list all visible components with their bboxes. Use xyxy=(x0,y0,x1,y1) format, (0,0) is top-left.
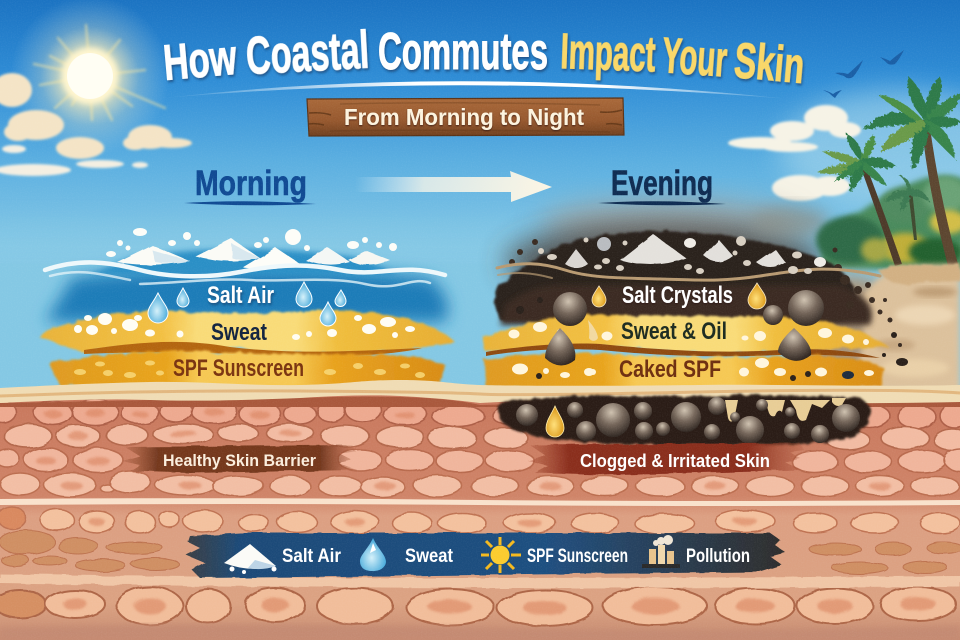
layer label: Sweat & Oil: Sweat & Oil xyxy=(621,318,727,345)
legend icon: water drop xyxy=(360,538,386,571)
skin cells: row 2 xyxy=(4,424,960,451)
oil drops xyxy=(592,283,766,309)
layer: salt air xyxy=(45,228,448,322)
pale strip below legend xyxy=(0,574,960,588)
legend xyxy=(186,533,785,578)
icon: sun xyxy=(10,0,170,156)
clouds: left xyxy=(0,73,192,176)
salt crystal piles xyxy=(565,234,785,268)
layer label: Sweat: Sweat xyxy=(211,319,267,346)
skin cells: row 1 xyxy=(0,398,960,429)
label: clogged and irritated skin: Clogged & Irritated Skin xyxy=(580,451,770,471)
birds xyxy=(823,50,904,98)
title word: Commutes: Commutes xyxy=(378,23,548,81)
layer label: Salt Crystals: Salt Crystals xyxy=(622,282,733,309)
dripping sunscreen xyxy=(725,398,846,422)
tan wave line xyxy=(497,264,880,280)
title word: Coastal: Coastal xyxy=(245,21,370,86)
clog rocks xyxy=(516,397,860,444)
background: evening haze xyxy=(505,199,830,300)
title xyxy=(161,21,807,94)
large dirt rocks xyxy=(545,290,824,366)
salt flecks xyxy=(106,228,397,257)
subtitle plank xyxy=(307,98,624,136)
skin base xyxy=(0,392,960,640)
brown stripe xyxy=(486,343,880,358)
layer label: Salt Air: Salt Air xyxy=(207,282,274,309)
background: sandy beach xyxy=(795,264,960,395)
sweat salt flecks xyxy=(74,313,415,340)
skin cells: row 3 xyxy=(0,448,960,473)
label: clogged and irritated skin xyxy=(528,443,804,475)
dirt speck fringe xyxy=(509,239,902,347)
layer: sweat xyxy=(38,310,455,357)
bottom mottled skin xyxy=(0,625,960,640)
legend text: SPF Sunscreen: SPF Sunscreen xyxy=(527,546,628,567)
legend text: Sweat: Sweat xyxy=(405,546,454,567)
clogged pores xyxy=(497,396,871,446)
clouds: right xyxy=(728,105,861,201)
skin cell centers xyxy=(36,408,936,615)
background: palm trees xyxy=(817,76,960,266)
salt piles xyxy=(117,238,390,269)
panel: morning layers xyxy=(38,228,455,389)
title word: How: How xyxy=(161,29,239,91)
skin cells: row 4 xyxy=(0,471,959,497)
skin surface band xyxy=(0,380,960,407)
title word: Your: Your xyxy=(660,27,729,88)
subtitle text: From Morning to Night xyxy=(344,104,584,130)
legend icon: salt pile xyxy=(224,544,276,574)
oily salt flecks xyxy=(508,322,874,378)
pale strip between skin layers xyxy=(0,498,960,506)
oil drip xyxy=(546,406,564,437)
label: healthy skin barrier: Healthy Skin Barrier xyxy=(163,451,316,470)
layer: sweat and oil xyxy=(484,314,890,358)
heading: Evening: Evening xyxy=(611,164,713,203)
label: healthy skin barrier xyxy=(122,445,356,473)
layer: SPF sunscreen xyxy=(48,351,445,389)
layer label: SPF Sunscreen: SPF Sunscreen xyxy=(173,355,304,382)
layer label: Caked SPF: Caked SPF xyxy=(619,356,721,383)
title word: Skin: Skin xyxy=(732,32,807,94)
arrow: morning to evening xyxy=(355,171,552,202)
title swoosh xyxy=(165,81,790,99)
layer: caked SPF xyxy=(484,353,884,391)
stone cells beside legend xyxy=(0,530,960,574)
title word: Impact: Impact xyxy=(560,23,657,82)
panel: evening layers xyxy=(484,231,908,391)
layer: salt crystals xyxy=(494,231,902,347)
legend icon: sun xyxy=(481,537,521,573)
sky background xyxy=(0,0,960,420)
heading: Morning: Morning xyxy=(195,164,307,203)
SPF flecks xyxy=(74,360,425,378)
water drops xyxy=(148,282,346,326)
brown stripe xyxy=(84,342,422,357)
legend text: Salt Air: Salt Air xyxy=(282,546,342,567)
legend text: Pollution: Pollution xyxy=(686,546,750,567)
skin cells: row 6 xyxy=(0,587,956,626)
legend icon: pollution factory xyxy=(642,535,680,568)
dark grime specks xyxy=(516,297,908,381)
wave lines xyxy=(45,262,445,286)
small salt rocks xyxy=(538,236,826,274)
skin cells: row 5 xyxy=(0,507,960,534)
background: tropical foliage xyxy=(816,175,960,272)
